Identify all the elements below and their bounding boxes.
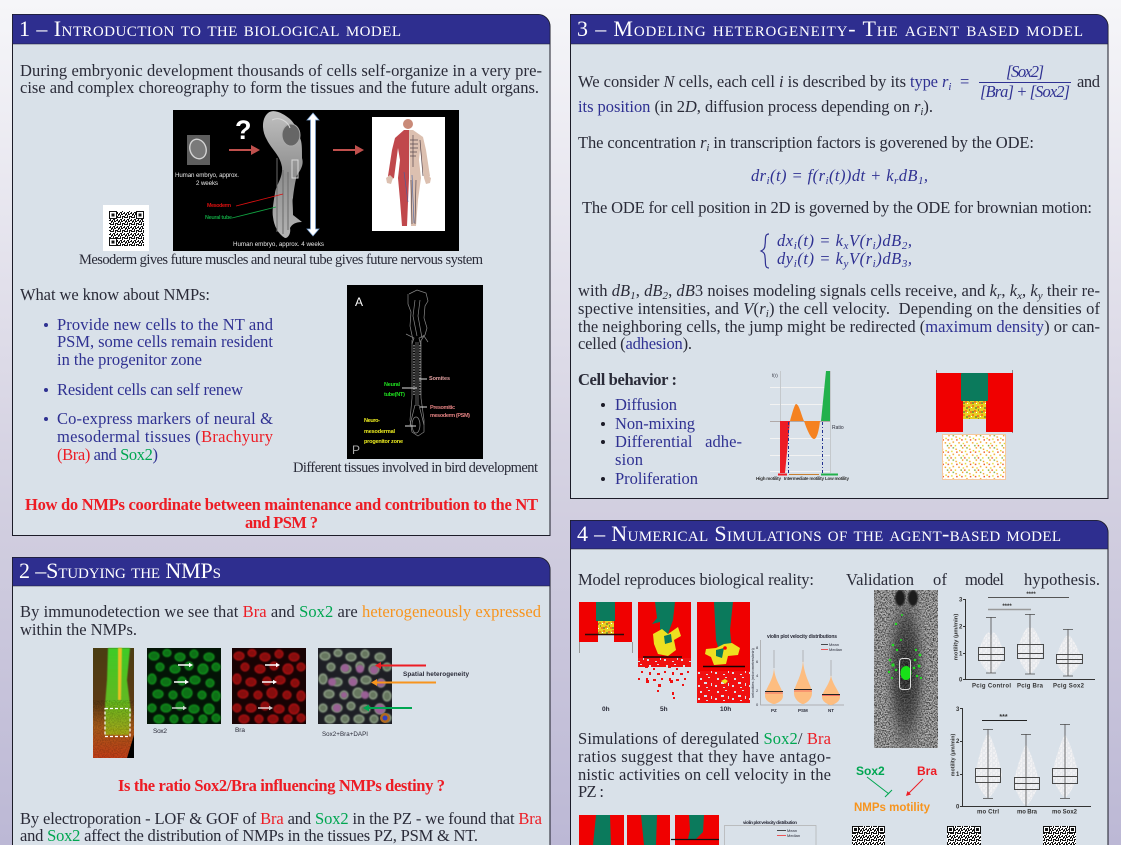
- noise paragraph: r: [997, 290, 1002, 302]
- noise paragraph: y: [1037, 290, 1043, 302]
- equation system: brownian motion: 2: [902, 240, 908, 252]
- antagonism diagram: Bra: [917, 764, 937, 778]
- box plot: Pcig motility: ****: [1026, 592, 1036, 598]
- human body illustration: [372, 117, 445, 231]
- second violin plot: [724, 820, 816, 845]
- question callout: and PSM ?: [245, 513, 318, 532]
- bullet list: NMP facts: Co-express markers of neural &: [57, 409, 273, 428]
- violin plot velocity distributions: 8: [756, 645, 759, 650]
- chart: f(r) ratio function: Low motility: [825, 476, 849, 481]
- fluorescence embryo validation image: [874, 590, 938, 748]
- box plot: morpholino motility: mo Sox2: [1052, 810, 1078, 816]
- box plot: Pcig motility: 3: [959, 598, 963, 604]
- box plot: morpholino motility: 2: [956, 739, 960, 745]
- bullet list: NMP facts: PSM, some cells remain resident: [57, 332, 273, 351]
- neuro-mesodermal progenitor zone label: Neuro-: [364, 418, 380, 424]
- violin plot velocity distributions: PSM: [798, 708, 808, 713]
- bullet list: cell behavior: sion: [615, 450, 643, 469]
- presomitic mesoderm label: mesoderm (PSM): [430, 413, 470, 419]
- second violin plot: Mean: [787, 828, 797, 833]
- bullet list: cell behavior: Proliferation: [615, 469, 698, 488]
- violin plot velocity distributions: 2: [756, 688, 759, 693]
- equation system: brownian motion: 3: [901, 258, 908, 270]
- validation heading: hypothesis.: [1024, 570, 1100, 589]
- box plot: Pcig motility: Pcig Sox2: [1053, 684, 1085, 690]
- type and position paragraph: We consider N cells, each cell i is described by its: [578, 72, 906, 91]
- embryo to adult figure: ?: [235, 115, 252, 145]
- equation system: brownian motion: x: [843, 240, 849, 252]
- mesoderm label and line: [207, 194, 283, 209]
- embryo outline: [406, 290, 428, 436]
- bird development diagram: [347, 285, 483, 459]
- question callout: [25, 495, 538, 532]
- type and position paragraph: [Bra] + [Sox2]: [980, 82, 1070, 101]
- neural tube label: [384, 382, 417, 398]
- violin plot velocity distributions: Mean: [829, 642, 839, 647]
- type and position paragraph: i: [920, 106, 923, 118]
- mesoderm label and line: Mesoderm: [207, 203, 231, 209]
- box plot: Pcig motility: motility (µm/min): [954, 614, 960, 660]
- equation: concentration ODE: (t))dt + k: [829, 166, 894, 185]
- equation: concentration ODE: i: [825, 175, 829, 187]
- type and position paragraph: [Sox2]: [1006, 62, 1044, 81]
- equation system: brownian motion: ,: [908, 249, 912, 268]
- somites label: Somites: [429, 376, 450, 382]
- bullet list: NMP facts: in the progenitor zone: [57, 350, 202, 369]
- intro paragraph: During embryonic development thousands of cells self-organize in a very pre-: [20, 61, 542, 80]
- panel 2 heading: 2 –Studying the NMPs: [19, 558, 221, 583]
- electroporation paragraph: [20, 809, 543, 845]
- noise paragraph: ,: [1022, 281, 1030, 300]
- box plot: Pcig motility: [954, 592, 1095, 690]
- chart: f(r) ratio function: Ratio: [832, 425, 844, 431]
- panel 1: introduction to the biological model: [12, 14, 550, 536]
- type and position paragraph: and: [1077, 72, 1101, 91]
- deregulated ratios paragraph: [578, 729, 832, 801]
- violin plot velocity distributions: velocities (micrometres/min): [750, 647, 755, 698]
- electroporation paragraph: By electroporation - LOF & GOF of Bra and Sox2 in the PZ - we found that Bra: [20, 809, 543, 828]
- type and position paragraph: [578, 62, 1101, 118]
- electroporation paragraph: and Sox2 affect the distribution of NMPs in the tissues PZ, PSM & NT.: [20, 826, 478, 845]
- concentration sentence: in transcription factors is goverened by the ODE:: [709, 133, 1034, 152]
- neural tube label and line: [205, 207, 276, 221]
- bullet list: cell behavior: [601, 395, 742, 488]
- equation system: brownian motion: i: [873, 240, 876, 252]
- box plot: Pcig motility: 1: [959, 652, 963, 658]
- noise paragraph: ,: [668, 281, 676, 300]
- microscopy labels: [153, 727, 368, 738]
- intro paragraph: [20, 61, 542, 97]
- equation system: brownian motion: i: [794, 240, 797, 252]
- neural tube label: tube(NT): [384, 392, 405, 398]
- noise paragraph: k: [1010, 281, 1022, 302]
- microscopy labels: Sox2+Bra+DAPI: [322, 731, 368, 738]
- bullet list: cell behavior: Diffusion: [615, 395, 677, 414]
- red arrow 1: [229, 145, 260, 155]
- neural tube label and line: Neural tube: [205, 215, 232, 221]
- equation: concentration ODE: 1: [918, 175, 923, 187]
- deregulated ratios paragraph: ratios suggest that they have antago-: [578, 747, 831, 766]
- panel 1 heading: 1 – Introduction to the biological model: [19, 16, 401, 41]
- box plot: Pcig motility: 0: [959, 678, 963, 684]
- second violin plot: violin plot velocity distribution: [743, 820, 797, 825]
- type and position paragraph: r: [942, 72, 948, 91]
- vertical double arrow: [307, 113, 319, 236]
- bullet list: NMP facts: (Bra) and Sox2): [57, 445, 158, 464]
- antagonism diagram: Sox2: [856, 764, 885, 778]
- noise paragraph: ,: [1001, 281, 1010, 300]
- bullet list: NMP facts: Resident cells can self renew: [57, 380, 243, 399]
- neuro-mesodermal progenitor zone label: [364, 418, 416, 445]
- embryo fluorescence image: [93, 648, 134, 758]
- panel 3 header bar: [570, 14, 1108, 44]
- equation system: brownian motion: (t) = k: [797, 231, 844, 250]
- chart: f(r) ratio function: Intermediate motility: [784, 476, 824, 481]
- equation system: brownian motion: )dB: [875, 249, 901, 268]
- chart: f(r) ratio function: High motility: [756, 476, 781, 481]
- noise paragraph: dB: [644, 281, 669, 302]
- equation system: brownian motion: [761, 231, 912, 270]
- simulation 10h: 10h: [720, 706, 731, 713]
- Sox2 microscopy: [147, 648, 221, 724]
- deregulated ratios paragraph: nistic activities on cell velocity in the: [578, 765, 831, 784]
- intro paragraph: cise and complex choreography to form the tissues and the future adult organs.: [20, 78, 539, 97]
- validation heading: model: [965, 570, 1004, 589]
- equation: concentration ODE: r: [894, 175, 899, 187]
- immunodetection paragraph: [20, 602, 542, 639]
- noise paragraph: 1: [630, 290, 636, 302]
- embryo to adult figure: [173, 110, 459, 251]
- noise paragraph: i: [766, 308, 769, 320]
- bullet list: cell behavior: Non-mixing: [615, 414, 695, 433]
- equation: concentration ODE: (t) = f(r: [770, 166, 826, 185]
- neuro-mesodermal progenitor zone label: progenitor zone: [364, 439, 403, 445]
- box plot: morpholino motility: ***: [999, 714, 1008, 721]
- main embryo: [263, 111, 303, 238]
- box plot: Pcig motility: Pcig Control: [972, 684, 1011, 690]
- bullet list: NMP facts: Provide new cells to the NT and: [57, 315, 274, 334]
- noise paragraph: 2: [663, 290, 669, 302]
- box plot: Pcig motility: ****: [1002, 604, 1012, 610]
- heterogeneity arrows: [363, 662, 469, 712]
- panel 1 header bar: [12, 14, 550, 44]
- violin plot velocity distributions: PZ: [771, 708, 777, 713]
- bullet list: cell behavior: Differential adhe-: [615, 432, 742, 451]
- deregulated ratios paragraph: Simulations of deregulated Sox2/ Bra: [578, 729, 832, 748]
- equation system: brownian motion: dx: [777, 231, 793, 250]
- simulation snapshot: [936, 370, 1013, 480]
- simulation 0h: [579, 602, 632, 713]
- equation: concentration ODE: dB: [899, 166, 918, 185]
- violin plot velocity distributions: 6: [756, 659, 759, 664]
- bird development diagram: P: [352, 443, 360, 457]
- simulation 10h: [697, 602, 750, 713]
- equation: concentration ODE: ,: [924, 166, 928, 185]
- QR codes: [852, 826, 1076, 845]
- microscopy labels: Bra: [235, 727, 245, 734]
- panel 3 heading: 3 – Modeling heterogeneity- The agent based model: [577, 16, 1083, 41]
- equation system: brownian motion: ,: [908, 231, 912, 250]
- microscopy labels: Sox2: [153, 728, 167, 735]
- neuro-mesodermal progenitor zone label: mesodermal: [364, 429, 395, 435]
- somites label: [419, 376, 450, 382]
- caption: bird development: Different tissues involved in bird development: [293, 460, 538, 476]
- box plot: morpholino motility: 1: [956, 772, 960, 778]
- noise paragraph: x: [1016, 290, 1022, 302]
- type and position paragraph: its position (in 2D, diffusion process depending on r: [578, 97, 920, 116]
- box plot: morpholino motility: mo Ctrl: [977, 810, 999, 816]
- embryo to adult figure: Human embryo, approx. 4 weeks: [233, 241, 324, 248]
- noise paragraph: k: [1030, 281, 1043, 302]
- violin plot velocity distributions: violin plot velocity distributions: [767, 634, 837, 640]
- box plot: morpholino motility: mo Bra: [1017, 810, 1038, 816]
- chart: f(r) ratio function: [756, 371, 849, 481]
- equation system: brownian motion: V(r: [849, 231, 873, 250]
- validation heading: of: [933, 570, 948, 589]
- equation system: brownian motion: y: [843, 258, 849, 270]
- box plot: Pcig motility: Pcig Bra: [1017, 684, 1044, 690]
- noise paragraph: dB3 noises modeling signals cells receive, and k: [676, 281, 997, 300]
- chart: f(r) ratio function: f(r): [772, 373, 778, 378]
- type and position paragraph: type: [910, 72, 938, 91]
- embryo to adult figure: Human embryo, approx.: [175, 172, 239, 179]
- bullet list: NMP facts: mesodermal tissues (Brachyury: [57, 427, 274, 446]
- panel 2: studying the NMPs: [12, 558, 550, 845]
- Bra microscopy: [232, 648, 306, 724]
- concentration sentence: i: [706, 142, 709, 154]
- antagonism diagram: [854, 764, 937, 814]
- type and position paragraph: i: [948, 81, 951, 93]
- deregulated ratios paragraph: PZ :: [578, 782, 604, 801]
- what we know heading: What we know about NMPs:: [20, 285, 210, 304]
- cell behavior heading: Cell behavior :: [578, 370, 677, 389]
- presomitic mesoderm label: [420, 405, 470, 419]
- immunodetection paragraph: By immunodetection we see that Bra and Sox2 are heterogeneously expressed: [20, 602, 542, 621]
- question callout: Is the ratio Sox2/Bra influencing NMPs destiny ?: [118, 776, 445, 795]
- type and position paragraph: =: [960, 72, 969, 91]
- red arrow 2: [333, 145, 364, 155]
- deregulated simulations: [579, 815, 719, 845]
- question callout: How do NMPs coordinate between maintenance and contribution to the NT: [25, 495, 538, 514]
- QR code: [103, 205, 149, 251]
- equation system: brownian motion: i: [873, 258, 876, 270]
- equation system: brownian motion: i: [794, 258, 797, 270]
- heterogeneity arrows: Spatial heterogeneity: [403, 671, 469, 678]
- panel 4: numerical simulations: [570, 520, 1108, 845]
- noise paragraph: with dB: [578, 281, 630, 300]
- concentration sentence: The concentration r: [578, 133, 707, 152]
- noise paragraph: [578, 281, 1100, 353]
- violin plot velocity distributions: 0: [756, 702, 759, 707]
- small embryo photo: [187, 135, 210, 165]
- type and position paragraph: ).: [923, 97, 933, 116]
- box plot: morpholino motility: 0: [956, 804, 960, 810]
- box plot: Pcig motility: 2: [959, 624, 963, 630]
- noise paragraph: ) the cell velocity. Depending on the densities of: [769, 299, 1100, 318]
- noise paragraph: the neighboring cells, the jump might be redirected (maximum density) or can-: [578, 317, 1100, 336]
- noise paragraph: celled (adhesion).: [578, 334, 692, 353]
- panel 2 header bar: [12, 558, 550, 586]
- presomitic mesoderm label: Presomitic: [430, 405, 455, 411]
- equation: concentration ODE: i: [767, 175, 770, 187]
- noise paragraph: ,: [636, 281, 644, 300]
- model reproduces heading: Model reproduces biological reality:: [578, 570, 814, 589]
- equation system: brownian motion: (t) = k: [797, 249, 844, 268]
- violin plot velocity distributions: 4: [756, 673, 759, 678]
- neural tube label: Neural: [384, 382, 400, 388]
- simulation 5h: [638, 602, 691, 713]
- box plot: morpholino motility: 3: [956, 707, 960, 713]
- violin plot velocity distributions: [750, 634, 844, 713]
- equation system: brownian motion: dy: [777, 249, 793, 268]
- equation system: brownian motion: V(r: [849, 249, 873, 268]
- immunodetection paragraph: within the NMPs.: [20, 620, 137, 639]
- embryo to adult figure: 2 weeks: [196, 180, 218, 187]
- equation system: brownian motion: )dB: [875, 231, 901, 250]
- validation heading: Validation: [846, 570, 914, 589]
- second violin plot: Median: [787, 833, 800, 838]
- bird development diagram: A: [355, 295, 363, 309]
- simulation 5h: 5h: [660, 706, 668, 713]
- validation heading: [846, 570, 1100, 589]
- position ODE sentence: The ODE for cell position in 2D is governed by the ODE for brownian motion:: [582, 198, 1092, 217]
- violin plot velocity distributions: NT: [828, 708, 834, 713]
- noise paragraph: their re-: [1043, 281, 1100, 300]
- antagonism diagram: NMPs motility: [854, 802, 931, 814]
- noise paragraph: spective intensities, and V(r: [578, 299, 766, 318]
- simulation 0h: 0h: [602, 706, 610, 713]
- violin plot velocity distributions: Median: [829, 647, 842, 652]
- panel 4 header bar: [570, 520, 1108, 549]
- panel 3: agent based model: [570, 14, 1108, 498]
- equation: concentration ODE: dr: [751, 166, 766, 185]
- merged microscopy: [318, 648, 392, 724]
- bullet list: NMP facts: [44, 315, 274, 464]
- caption: mesoderm and neural tube: Mesoderm gives future muscles and neural tube gives future nervous system: [79, 252, 484, 268]
- box plot: morpholino motility: motility (µm/min): [950, 734, 956, 776]
- panel 4 heading: 4 – Numerical Simulations of the agent-based model: [577, 521, 1061, 546]
- box plot: morpholino motility: [950, 707, 1091, 816]
